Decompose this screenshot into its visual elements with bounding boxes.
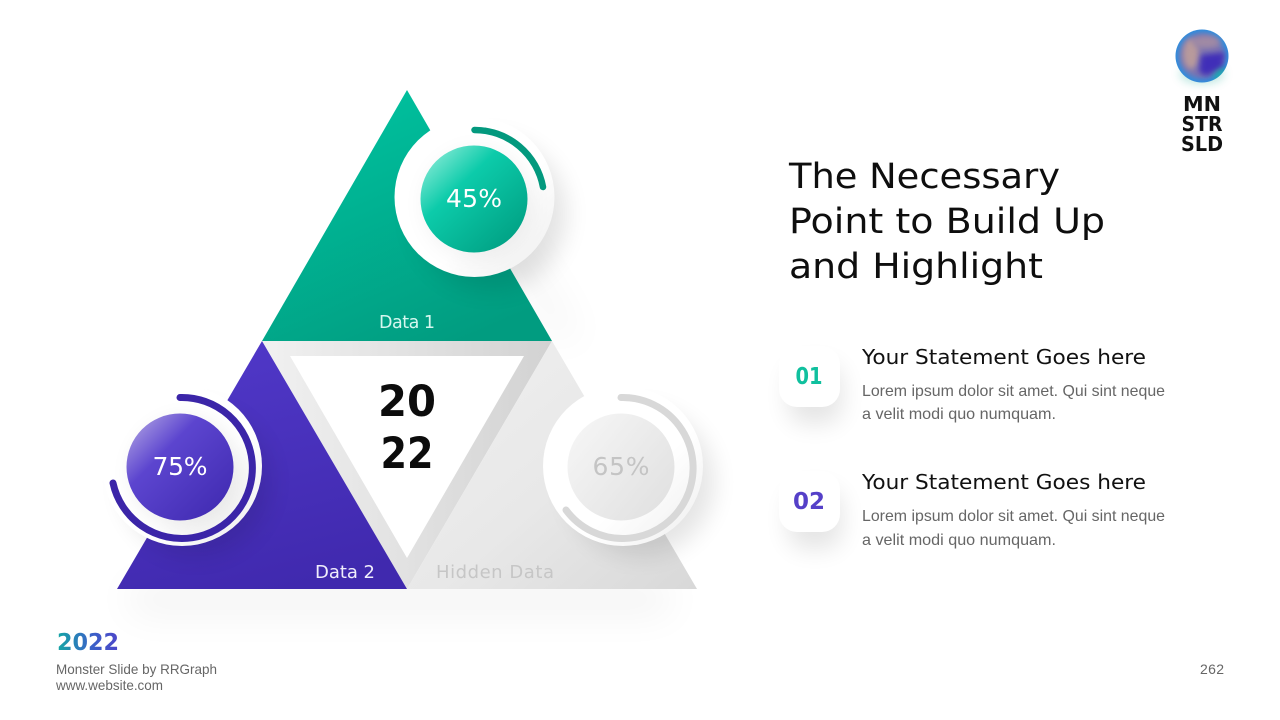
triangle: data 2: Data 2 <box>315 562 375 583</box>
ground shadow <box>130 585 670 613</box>
centre frame triangle <box>262 341 552 589</box>
logo text: MN <box>1183 92 1221 116</box>
number badge 02 <box>779 471 842 549</box>
title: Point to Build Up <box>789 202 1105 242</box>
triangle: hidden data: Hidden Data <box>436 562 554 583</box>
statement text 02: Your Statement Goes here <box>861 470 1146 494</box>
statement text 01 <box>861 345 1165 423</box>
gauge: 65%: 65% <box>592 452 650 481</box>
statement text 02 <box>861 470 1165 549</box>
number badge 01 <box>779 346 842 424</box>
number badge 02: 02 <box>793 489 825 515</box>
statement text 02: a velit modi quo numquam. <box>862 532 1056 549</box>
gauge: 75%: 75% <box>152 452 208 481</box>
footer year: 2022 <box>57 630 119 656</box>
statement 01 <box>779 345 1165 424</box>
logo text <box>1181 92 1223 156</box>
centre white triangle with year: 22 <box>380 429 434 479</box>
number badge 01: 01 <box>796 364 822 390</box>
footer <box>55 630 217 693</box>
centre white triangle with year <box>290 356 524 558</box>
title <box>788 157 1105 287</box>
statement text 01: Your Statement Goes here <box>861 345 1146 369</box>
gauge: 75% <box>102 386 270 556</box>
triangle: data 1: Data 1 <box>379 313 435 333</box>
triangle diagram <box>102 90 714 613</box>
triangle: hidden data <box>407 341 697 589</box>
statement text 01: a velit modi quo numquam. <box>862 406 1056 423</box>
icon: sphere <box>1176 30 1229 83</box>
logo text: SLD <box>1181 132 1223 156</box>
gauge: 45%: 45% <box>446 184 502 213</box>
statement 02 <box>779 470 1165 549</box>
triangle: data 1 <box>262 90 552 341</box>
triangle: data 2 <box>117 341 407 589</box>
right-side shadow of top triangle <box>470 200 585 341</box>
logo text: STR <box>1182 112 1223 136</box>
title: and Highlight <box>789 247 1043 287</box>
title: The Necessary <box>788 157 1060 197</box>
footer website: www.website.com <box>55 677 163 693</box>
centre white triangle with year: 20 <box>378 377 436 427</box>
logo <box>1176 30 1229 156</box>
page number: 262 <box>1200 661 1224 677</box>
gauge: 45% <box>394 117 566 290</box>
statement text 01: Lorem ipsum dolor sit amet. Qui sint neque <box>862 383 1165 400</box>
gauge: 65% <box>543 386 714 556</box>
footer credit: Monster Slide by RRGraph <box>56 661 217 677</box>
statement text 02: Lorem ipsum dolor sit amet. Qui sint neque <box>862 508 1165 525</box>
